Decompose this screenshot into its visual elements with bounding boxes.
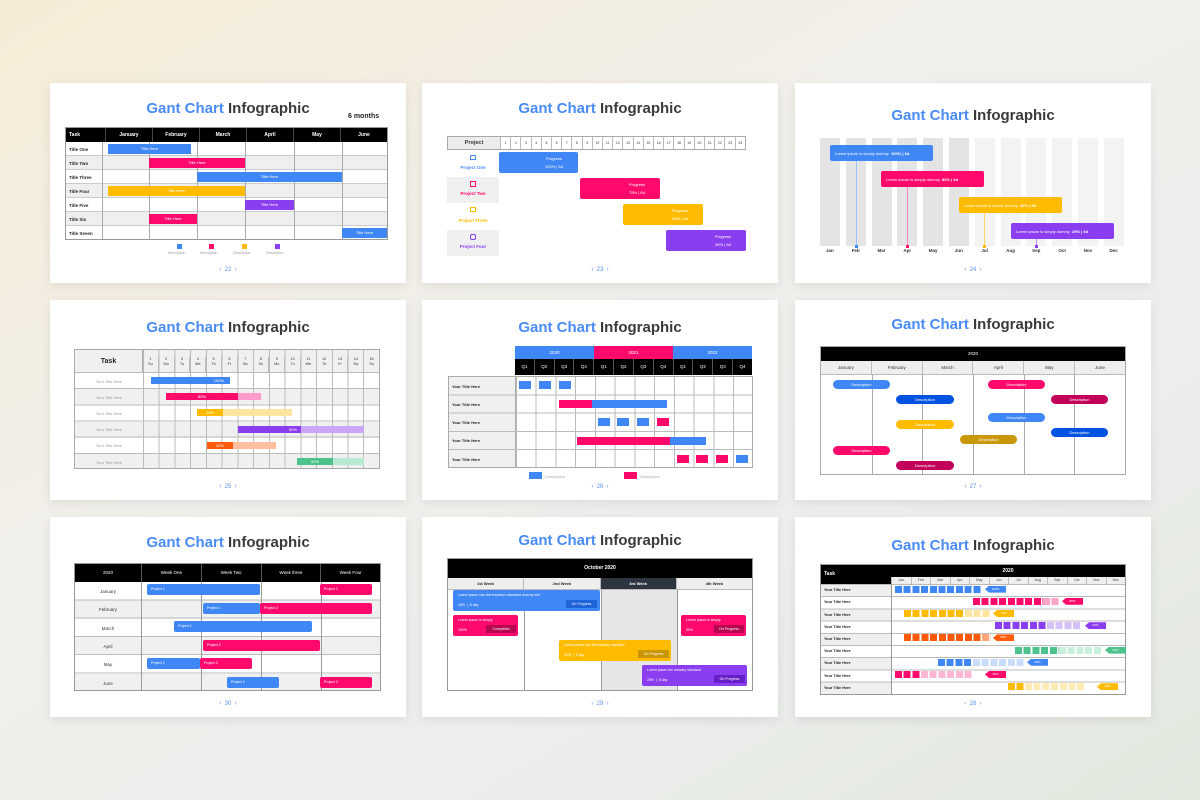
quarter header: Q1 xyxy=(601,364,607,369)
bars: Progress xyxy=(672,208,688,213)
table: Th xyxy=(211,362,216,366)
table: May xyxy=(1045,365,1053,370)
block bars: 60% xyxy=(1092,623,1098,627)
cards: On Progress xyxy=(719,627,739,631)
legend xyxy=(529,472,660,479)
table: March xyxy=(941,365,954,370)
bars: Project 1 xyxy=(151,587,165,591)
pills: Description xyxy=(851,382,872,387)
table: Fr xyxy=(228,362,231,366)
title: Gant Chart Infographic xyxy=(891,537,1055,554)
quarter header: Q4 xyxy=(581,364,587,369)
bars: Title Here xyxy=(261,174,278,179)
table: Week Four xyxy=(340,570,362,575)
bars: Lorem ipsum is simply dummy 80% | 6d xyxy=(886,177,958,182)
table: 3rd Week xyxy=(629,581,647,586)
slide 26: quarterly gantt xyxy=(422,300,778,500)
table: Task xyxy=(69,132,80,138)
block bars: 90% xyxy=(1000,635,1006,639)
bars: Title Here xyxy=(164,216,182,221)
table: Your Title Here xyxy=(96,411,122,416)
bars: Project 1 xyxy=(207,606,221,610)
table: Aug xyxy=(1035,578,1041,582)
bars xyxy=(147,584,372,688)
header row: 12 xyxy=(616,141,620,145)
grid: Your Title Here xyxy=(452,420,480,425)
table: Apr xyxy=(957,578,962,582)
table: Your Title Here xyxy=(96,460,122,465)
table: April xyxy=(264,132,276,138)
header row: 11 xyxy=(606,141,609,145)
month columns: Feb xyxy=(852,248,860,253)
table: Your Title Here xyxy=(96,379,122,384)
table: Task xyxy=(101,358,116,365)
legend: Description xyxy=(266,251,284,255)
bars: Project 2 xyxy=(207,642,221,646)
header row: 2 xyxy=(515,141,517,145)
month columns: Apr xyxy=(903,248,911,253)
header row: 4 xyxy=(535,141,537,145)
quarter header: Q1 xyxy=(521,364,527,369)
header row: 9 xyxy=(586,141,588,145)
block bars: 30% xyxy=(992,672,998,676)
bars: 50% xyxy=(311,458,319,464)
legend: Description xyxy=(233,251,251,255)
table: May xyxy=(976,578,983,582)
table: March xyxy=(102,626,114,631)
table: Your Title Here xyxy=(824,624,851,628)
month columns: Sep xyxy=(1032,248,1040,253)
table: 5 xyxy=(213,357,215,361)
table: 2nd Week xyxy=(553,581,571,586)
slide 28: yearly block gantt xyxy=(795,517,1151,717)
pills: Description xyxy=(915,463,935,468)
legend: Description xyxy=(545,474,565,478)
table: Week Two xyxy=(221,570,242,575)
title: Gant Chart Infographic xyxy=(891,107,1055,124)
header row: 15 xyxy=(646,141,650,145)
table: Oct xyxy=(1074,578,1079,582)
month columns: May xyxy=(929,248,937,253)
cards: Lorem ipsum is simply xyxy=(458,618,493,622)
slide 24: monthly column gantt xyxy=(795,83,1151,283)
pills: Description xyxy=(1069,430,1090,435)
table: Su xyxy=(148,362,153,366)
page number: ‹ 28 › xyxy=(964,701,982,707)
table: Your Title Here xyxy=(824,661,851,665)
bars: Project 2 xyxy=(324,587,338,591)
bars: Lorem ipsum is simply dummy 40% | 6d xyxy=(964,203,1036,208)
table: Tu xyxy=(180,362,184,366)
table: Mar xyxy=(937,578,943,582)
table: 4 xyxy=(197,357,199,361)
cards: On Progress xyxy=(572,602,591,606)
pills: Description xyxy=(851,448,872,453)
table: Your Title Here xyxy=(96,395,122,400)
bars: 55% | 6d xyxy=(672,216,688,221)
year header: 2021 xyxy=(628,350,638,355)
table: Jan xyxy=(898,578,904,582)
page number: ‹ 24 › xyxy=(964,267,982,273)
table: Your Title Here xyxy=(824,612,851,616)
cards: 50% xyxy=(686,628,693,632)
month columns: Mar xyxy=(877,248,886,253)
pills: Description xyxy=(1006,382,1026,387)
table: February xyxy=(888,365,906,370)
table: Your Title Here xyxy=(824,637,851,641)
bars: Progress xyxy=(629,182,645,187)
legend: Description xyxy=(168,251,186,255)
bars xyxy=(830,145,1114,239)
bars: Title Here xyxy=(141,146,158,151)
table: Th xyxy=(322,362,326,366)
grid xyxy=(448,376,753,468)
year header: 2022 xyxy=(707,350,718,355)
header row: Project xyxy=(465,140,483,146)
project labels xyxy=(447,155,499,256)
table xyxy=(74,563,381,691)
title: Gant Chart Infographic xyxy=(518,319,682,336)
table: Jul xyxy=(1016,578,1020,582)
cards: 40% | 6 day xyxy=(564,653,584,657)
year header: 2020 xyxy=(549,350,560,355)
table: Su xyxy=(369,362,374,366)
cards xyxy=(453,590,747,686)
table: April xyxy=(994,365,1003,370)
block bars: 70% xyxy=(1000,611,1006,615)
table: Week three xyxy=(279,570,302,575)
table: Feb xyxy=(918,578,924,582)
table: 12 xyxy=(322,357,326,361)
slide 23: project gantt xyxy=(422,83,778,283)
header row: 17 xyxy=(667,141,671,145)
project labels: Project Four xyxy=(460,244,486,249)
header row: 20 xyxy=(698,141,701,145)
header row: 18 xyxy=(677,141,681,145)
table: Your Title Here xyxy=(824,686,851,690)
table: Mo xyxy=(274,362,279,366)
bars: Project 2 xyxy=(264,606,278,610)
project labels: Project One xyxy=(460,165,486,170)
table: 2020 xyxy=(103,570,113,575)
table: Your Title Here xyxy=(824,649,851,653)
label: 6 months: 6 months xyxy=(348,113,379,120)
table: Title Seven xyxy=(69,231,93,236)
pills: Description xyxy=(915,397,935,402)
cards: On Progress xyxy=(720,677,739,681)
table: June xyxy=(358,132,370,138)
bars: Title Here xyxy=(168,188,185,193)
legend: Description xyxy=(640,474,660,478)
header row xyxy=(447,136,746,150)
title: Gant Chart Infographic xyxy=(146,534,310,551)
table: 11 xyxy=(306,357,310,361)
table: February xyxy=(165,132,187,138)
cards: On Progress xyxy=(644,652,663,656)
grid: Your Title Here xyxy=(452,402,480,407)
table xyxy=(820,564,1126,695)
title: Gant Chart Infographic xyxy=(891,316,1055,333)
table: 4th Week xyxy=(706,581,723,586)
bars xyxy=(519,381,748,463)
slide 27: description pills gantt xyxy=(795,300,1151,500)
page number: ‹ 25 › xyxy=(219,484,237,490)
table: Your Title Here xyxy=(824,588,851,592)
month columns: Jun xyxy=(955,248,963,253)
quarter header: Q3 xyxy=(720,364,726,369)
page number: ‹ 30 › xyxy=(219,701,237,707)
table: Week One xyxy=(161,570,182,575)
table: Su xyxy=(259,362,263,366)
table: Your Title Here xyxy=(96,427,122,432)
bars: Project 2 xyxy=(204,661,218,665)
slide 30: weekly project gantt xyxy=(50,517,406,717)
grid: Your Title Here xyxy=(452,457,480,462)
quarter header: Q1 xyxy=(680,364,686,369)
grid: Your Title Here xyxy=(452,438,480,443)
cards: Lorem ipsum has the industry standard xyxy=(564,643,625,647)
bars: Project 1 xyxy=(178,624,192,628)
connector lines and markers xyxy=(855,161,1038,248)
title: Gant Chart Infographic xyxy=(518,532,682,549)
table: April xyxy=(103,644,112,649)
block bars xyxy=(895,586,1126,690)
cards: Completed xyxy=(493,627,509,631)
table xyxy=(447,558,753,691)
block bars: 50% xyxy=(1112,648,1118,652)
quarter header xyxy=(515,359,752,375)
bars xyxy=(151,377,364,465)
table: May xyxy=(312,132,322,138)
table: Task xyxy=(824,571,835,577)
bars: Project 2 xyxy=(324,680,338,684)
cards: Lorem ipsum the industry standard xyxy=(647,668,701,672)
quarter header: Q4 xyxy=(660,364,666,369)
table: 7 xyxy=(244,357,246,361)
quarter header: Q3 xyxy=(561,364,567,369)
quarter header: Q4 xyxy=(740,364,746,369)
table xyxy=(65,127,388,240)
table: October 2020 xyxy=(584,565,616,571)
pills: Description xyxy=(915,422,935,427)
bars: 100% xyxy=(214,378,224,383)
header row: 21 xyxy=(708,141,712,145)
header row: 24 xyxy=(738,141,742,145)
table: 1st Week xyxy=(477,581,494,586)
table: January xyxy=(838,365,854,370)
grid: Your Title Here xyxy=(452,384,480,389)
block bars: 80% xyxy=(1069,599,1076,603)
legend xyxy=(168,244,284,255)
table: Mo xyxy=(164,362,169,366)
cards: Lorem ipsum has the industry's standard dummy text xyxy=(458,593,540,597)
table: 13 xyxy=(338,357,342,361)
table xyxy=(820,346,1126,475)
bars: 20% xyxy=(206,410,214,415)
header row: 16 xyxy=(657,141,661,145)
table: Your Title Here xyxy=(96,443,122,448)
legend: Description xyxy=(200,251,218,255)
header row: 6 xyxy=(556,141,558,145)
header row: 7 xyxy=(566,141,568,145)
table: Your Title Here xyxy=(824,674,851,678)
table: 2020 xyxy=(968,351,978,356)
table: Title Six xyxy=(69,217,86,222)
block bars: 40% xyxy=(1034,660,1040,664)
table: Nov xyxy=(1093,578,1099,582)
quarter header: Q2 xyxy=(541,364,547,369)
header row: 10 xyxy=(595,141,599,145)
slide 25: daily gantt xyxy=(50,300,406,500)
bars xyxy=(108,144,387,238)
table: We xyxy=(306,362,311,366)
bars: Title Here xyxy=(188,160,206,165)
table: February xyxy=(99,607,117,612)
table: Dec xyxy=(1113,578,1119,582)
bars: 75% | 6d xyxy=(629,190,645,195)
table: Title Two xyxy=(69,161,88,166)
table: 8 xyxy=(260,357,262,361)
table: May xyxy=(104,662,112,667)
page number: ‹ 22 › xyxy=(219,267,237,273)
bars: Title Here xyxy=(356,230,373,235)
table: Your Title Here xyxy=(824,600,851,604)
quarter header: Q3 xyxy=(640,364,646,369)
month columns: Dec xyxy=(1110,248,1118,253)
bars: Project 1 xyxy=(151,661,165,665)
table: 9 xyxy=(276,357,278,361)
page number: ‹ 27 › xyxy=(964,484,982,490)
quarter header: Q2 xyxy=(700,364,706,369)
title: Gant Chart Infographic xyxy=(146,319,310,336)
table: 6 xyxy=(228,357,230,361)
month columns: Jul xyxy=(981,248,988,253)
table: January xyxy=(119,132,139,138)
table: 10 xyxy=(290,357,295,361)
table: Tu xyxy=(290,362,295,366)
table: Jun xyxy=(996,578,1002,582)
month columns: Oct xyxy=(1058,248,1066,253)
header row: 1 xyxy=(505,141,507,145)
bars: Progress xyxy=(715,234,731,239)
title: Gant Chart Infographic xyxy=(146,100,310,117)
table: Fr xyxy=(338,362,342,366)
block bars: 20% xyxy=(1104,684,1110,688)
header row: 19 xyxy=(687,141,691,145)
block bars: 100% xyxy=(992,587,999,591)
bars: 36% | 6d xyxy=(715,242,731,247)
table: Title Three xyxy=(69,175,92,180)
page number: ‹ 26 › xyxy=(591,484,609,490)
cards: 40% | 6 day xyxy=(458,603,478,607)
table: June xyxy=(1095,365,1105,370)
quarter header: Q2 xyxy=(621,364,627,369)
title: Gant Chart Infographic xyxy=(518,100,682,117)
bars: 50% xyxy=(289,426,297,432)
month columns: Nov xyxy=(1084,248,1092,253)
bars: Lorem ipsum is simply dummy 25% | 6d xyxy=(1016,229,1088,234)
table: March xyxy=(216,132,230,138)
page number: ‹ 29 › xyxy=(591,701,609,707)
table: 15 xyxy=(369,357,374,361)
year header xyxy=(515,346,752,359)
bars: Progress xyxy=(546,156,562,161)
cards: Lorem ipsum is simply xyxy=(686,618,721,622)
bars: Lorem ipsum is simply dummy 100% | 6d xyxy=(835,151,909,156)
table: 2020 xyxy=(1002,568,1014,574)
header row: 23 xyxy=(728,141,732,145)
table: June xyxy=(103,681,113,686)
bars: 80% xyxy=(198,394,206,399)
month columns: Jan xyxy=(826,248,834,253)
table: Title Four xyxy=(69,189,89,194)
header row: 3 xyxy=(525,141,527,145)
header row: 5 xyxy=(545,141,547,145)
bars: 30% xyxy=(216,442,224,448)
table: 1 xyxy=(149,357,151,361)
table: January xyxy=(100,589,116,594)
table: Title Five xyxy=(69,203,88,208)
table: Sep xyxy=(1054,578,1060,582)
table: 14 xyxy=(354,357,358,361)
pills: Description xyxy=(1069,397,1090,402)
header row: 14 xyxy=(636,141,640,145)
slide 22: six month gantt xyxy=(50,83,406,283)
slide 29: October weekly cards xyxy=(422,517,778,717)
table xyxy=(74,349,380,469)
table: Sa xyxy=(353,362,358,366)
table: Title One xyxy=(69,147,88,152)
header row: 13 xyxy=(626,141,630,145)
table: 3 xyxy=(181,357,183,361)
header row: 22 xyxy=(718,141,722,145)
bars: Project 1 xyxy=(231,680,245,684)
pills: Description xyxy=(978,437,998,442)
cards: 25% | 6 day xyxy=(647,678,667,682)
month columns: Aug xyxy=(1006,248,1015,253)
page number: ‹ 23 › xyxy=(591,267,609,273)
table: Sa xyxy=(243,362,248,366)
project labels: Project Two xyxy=(460,191,486,196)
bars: Title Here xyxy=(261,202,278,207)
table: 2 xyxy=(165,357,167,361)
bars: 100% | 6d xyxy=(545,164,563,169)
cards: 100% xyxy=(458,628,467,632)
project labels: Project Three xyxy=(459,218,487,223)
bars xyxy=(499,152,746,251)
pills: Description xyxy=(1006,415,1026,420)
table: We xyxy=(195,362,201,366)
month columns xyxy=(820,138,1124,253)
header row: 8 xyxy=(576,141,578,145)
pills xyxy=(833,380,1108,470)
